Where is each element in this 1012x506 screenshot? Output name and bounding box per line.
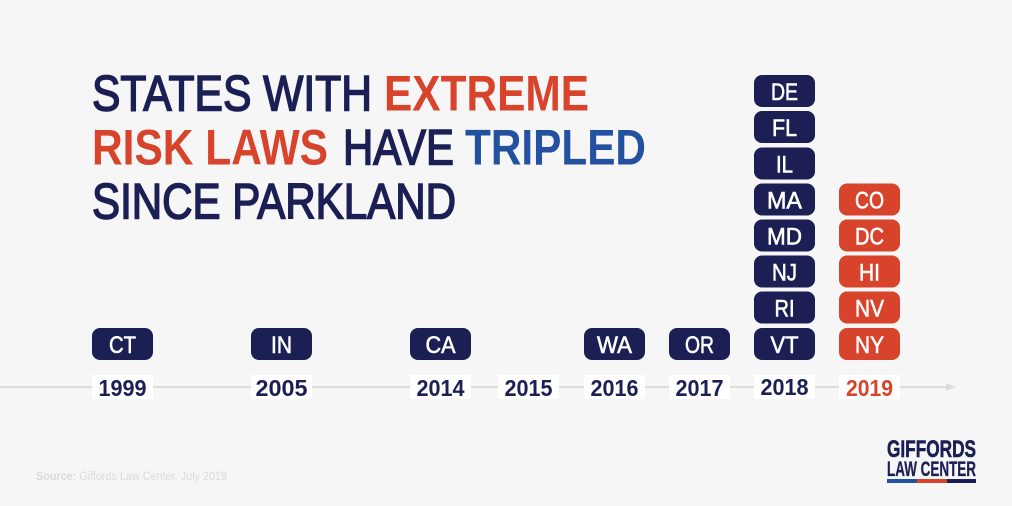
title: EXTREME <box>384 66 589 122</box>
year labels: 2016 <box>590 375 638 401</box>
state pills: 2019: NY <box>855 332 884 359</box>
title: RISK LAWS <box>92 120 328 176</box>
title: HAVE <box>343 120 454 176</box>
year labels: 2017 <box>676 375 724 401</box>
state pills: earlier years: CT <box>109 332 136 359</box>
state pills: 2018: NJ <box>772 260 797 286</box>
source note: Source: Giffords Law Center, July 2019 <box>36 471 227 483</box>
year labels: 2005 <box>256 375 308 401</box>
year labels: 1999 <box>98 375 146 401</box>
state pills: earlier years <box>92 328 730 360</box>
title <box>92 66 646 230</box>
state pills: 2019: HI <box>859 260 880 286</box>
state pills: 2019: DC <box>855 224 884 250</box>
year labels: 2014 <box>416 375 465 401</box>
timeline axis arrow <box>0 383 956 391</box>
year labels: 2019 <box>846 375 893 401</box>
state pills: earlier years: IN <box>271 332 292 359</box>
state pills: earlier years: OR <box>685 332 714 359</box>
state pills: 2018 <box>754 75 815 360</box>
title: STATES WITH <box>92 66 372 122</box>
year labels: 2018 <box>760 374 809 400</box>
state pills: 2018: FL <box>772 115 797 142</box>
logo: Giffords Law Center: GIFFORDS <box>887 436 976 463</box>
state pills: 2018: MD <box>767 224 802 250</box>
logo: Giffords Law Center <box>887 436 976 483</box>
state pills: earlier years: CA <box>426 332 456 359</box>
state pills: 2018: DE <box>771 79 798 106</box>
title: SINCE PARKLAND <box>92 174 456 230</box>
year labels: 2015 <box>504 375 553 401</box>
state pills: 2018: IL <box>776 152 793 178</box>
state pills: 2018: VT <box>770 332 799 359</box>
state pills: 2018: MA <box>767 188 802 214</box>
state pills: 2019: CO <box>855 188 884 214</box>
title: TRIPLED <box>465 120 646 176</box>
state pills: 2018: RI <box>774 296 794 322</box>
year labels <box>92 374 900 401</box>
state pills: 2019: NV <box>855 296 884 322</box>
state pills: 2019 <box>839 184 900 360</box>
state pills: earlier years: WA <box>597 332 632 359</box>
